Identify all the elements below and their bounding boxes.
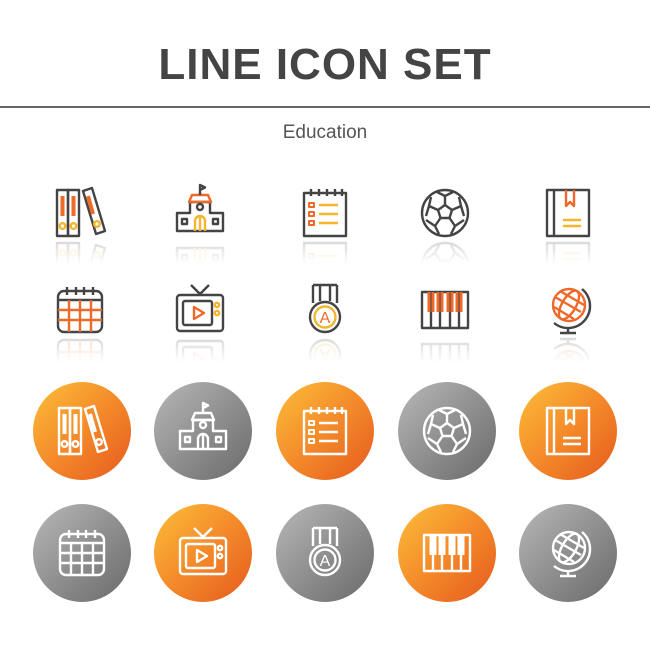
subtitle: Education xyxy=(283,122,367,143)
circle icons row 3 xyxy=(33,382,617,480)
line icons row 1 xyxy=(56,184,590,260)
circle icons row 4 xyxy=(33,504,617,602)
title: LINE ICON SET xyxy=(158,40,492,89)
line icons row 2 xyxy=(56,284,592,358)
icon grid xyxy=(33,184,617,602)
